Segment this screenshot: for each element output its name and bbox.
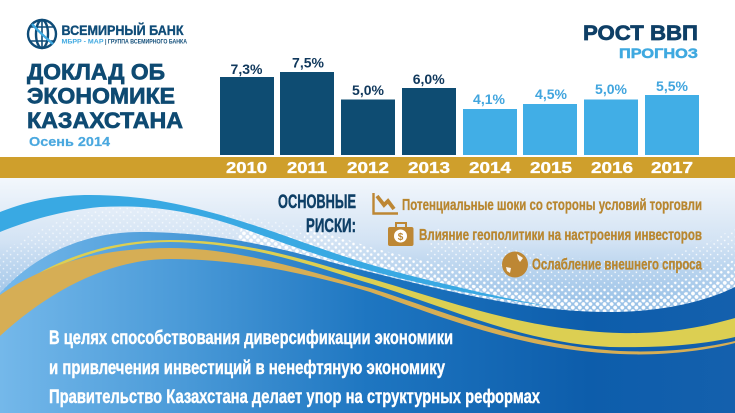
bars actual <box>220 72 456 155</box>
logo group name: | ГРУППА ВСЕМИРНОГО БАНКА <box>105 38 187 46</box>
values forecast: 5,0% <box>595 81 628 97</box>
bottom statement: Правительство Казахстана делает упор на структурных реформах <box>49 386 540 408</box>
year labels: 2013 <box>408 160 450 177</box>
title: КАЗАХСТАНА <box>27 108 183 133</box>
bars forecast <box>463 95 699 155</box>
values forecast: 5,5% <box>656 78 689 94</box>
halftone dots right <box>240 232 735 312</box>
wave: gold band <box>0 248 735 354</box>
title: ДОКЛАД ОБ <box>27 60 165 84</box>
values forecast <box>473 78 689 107</box>
logo: World Bank <box>28 20 187 48</box>
wave: main blue body <box>0 232 735 413</box>
year labels: 2014 <box>469 160 511 177</box>
values forecast: 4,5% <box>535 86 568 102</box>
subtitle: season: Осень 2014 <box>29 134 111 149</box>
bar chart <box>220 54 699 177</box>
year labels: 2016 <box>591 160 633 177</box>
bottom statement: В целях способствования диверсификации экономики <box>49 327 453 349</box>
icon: globe <box>28 20 56 48</box>
title: ЭКОНОМИКЕ <box>27 84 175 108</box>
icon: falling chart <box>374 193 398 214</box>
icon: briefcase with dollar: $ <box>398 232 404 243</box>
values actual: 7,5% <box>292 54 325 70</box>
year labels: 2017 <box>651 160 693 177</box>
wave: yellow band <box>0 240 735 347</box>
year labels <box>226 160 693 177</box>
values actual: 6,0% <box>413 71 445 87</box>
heading: main risks: РИСКИ: <box>306 216 356 237</box>
bottom statement <box>49 327 540 408</box>
year labels: 2012 <box>347 160 389 177</box>
halftone dots left <box>0 232 300 296</box>
gold band <box>0 157 735 178</box>
values actual <box>231 54 445 98</box>
year labels: 2010 <box>226 160 267 177</box>
heading: GDP growth: РОСТ ВВП <box>583 22 698 45</box>
values actual: 5,0% <box>352 82 385 98</box>
icon: globe <box>502 252 528 278</box>
bottom statement: и привлечения инвестиций в ненефтяную экономику <box>49 357 445 379</box>
values forecast: 4,1% <box>473 91 506 107</box>
year labels: 2015 <box>530 160 572 177</box>
heading: forecast: ПРОГНОЗ <box>619 45 698 61</box>
icon: briefcase with dollar <box>388 223 414 246</box>
values actual: 7,3% <box>231 61 263 77</box>
logo name: ВСЕМИРНЫЙ БАНК <box>62 23 184 38</box>
heading: main risks: ОСНОВНЫЕ <box>278 192 356 213</box>
heading: main risks <box>278 192 356 237</box>
wave: light blue band <box>0 195 560 308</box>
logo subtitle: МБРР - МАР <box>62 38 104 46</box>
lower background gradient <box>0 178 735 318</box>
title <box>27 60 183 133</box>
year labels: 2011 <box>287 160 327 177</box>
